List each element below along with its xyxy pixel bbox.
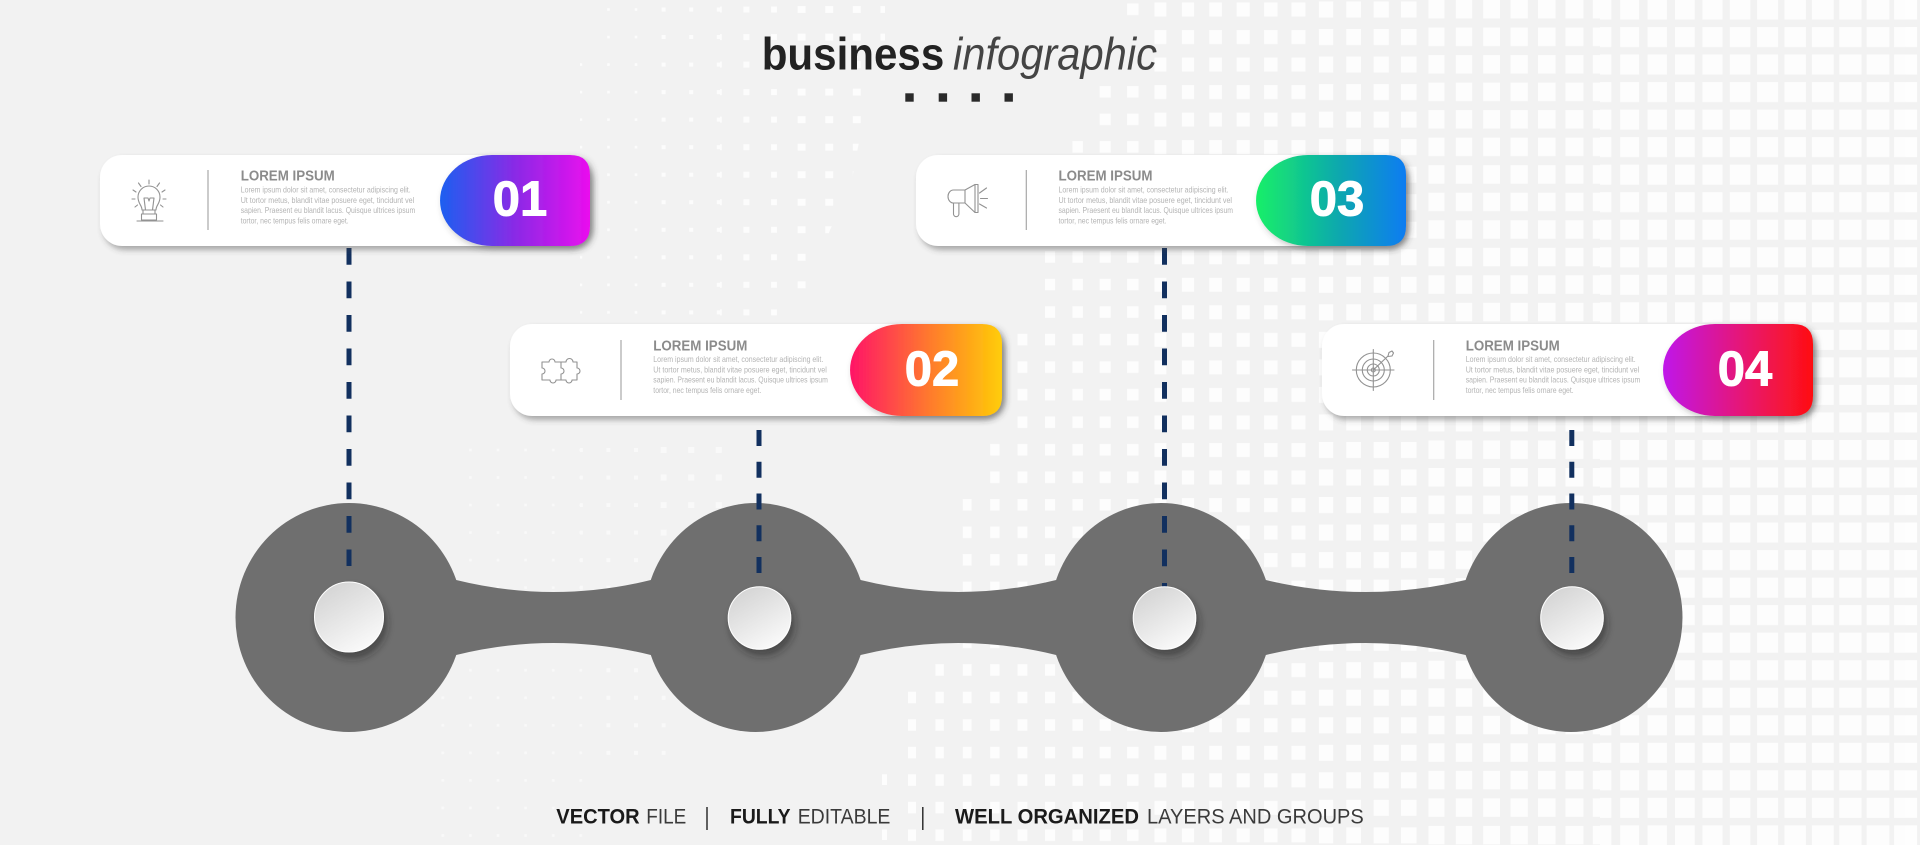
card 03 text: Lorem ipsum dolor sit amet, consectetur adipiscing elit. xyxy=(1058,184,1228,194)
card 01 text: Ut tortor metus, blandit vitae posuere eget, tincidunt vel xyxy=(241,195,414,205)
card 01 text: Lorem ipsum dolor sit amet, consectetur adipiscing elit. xyxy=(241,184,411,194)
node 1 xyxy=(314,582,384,652)
card 04 text: Ut tortor metus, blandit vitae posuere eget, tincidunt vel xyxy=(1466,364,1639,374)
card 02 text: Lorem ipsum dolor sit amet, consectetur adipiscing elit. xyxy=(653,354,823,364)
panel: card 01 xyxy=(100,155,590,246)
card 02 text: Ut tortor metus, blandit vitae posuere eget, tincidunt vel xyxy=(653,364,827,374)
card 03 text: LOREM IPSUM xyxy=(1058,169,1152,185)
badge 01: 01 xyxy=(493,172,547,226)
card 01 text: tortor, nec tempus felis ornare eget. xyxy=(241,216,349,226)
card 03 text: tortor, nec tempus felis ornare eget. xyxy=(1058,216,1166,226)
card 02 text: sapien. Praesent eu blandit lacus. Quisque ultrices ipsum xyxy=(653,375,828,385)
badge 01 xyxy=(440,155,590,246)
card 04 text: sapien. Praesent eu blandit lacus. Quisque ultrices ipsum xyxy=(1466,375,1640,385)
card 02 text xyxy=(653,339,828,395)
node 3 xyxy=(1133,587,1196,649)
card 04 text xyxy=(1466,339,1640,395)
connector 4 dashes xyxy=(1569,430,1574,573)
connector 2 dashes xyxy=(756,430,762,573)
title: infographic xyxy=(953,28,1157,79)
card 04 text: LOREM IPSUM xyxy=(1466,339,1560,355)
card 02 text: LOREM IPSUM xyxy=(653,339,747,355)
badge 02 xyxy=(850,324,1002,416)
footer tagline xyxy=(556,805,1364,830)
panel: card 03 xyxy=(916,155,1406,246)
icon: target xyxy=(1352,350,1394,390)
icon: megaphone xyxy=(948,184,988,217)
card 04 text: Lorem ipsum dolor sit amet, consectetur adipiscing elit. xyxy=(1466,354,1636,364)
badge 03 xyxy=(1256,155,1406,246)
footer tagline: FILE xyxy=(646,805,686,828)
badge 04 xyxy=(1663,324,1813,416)
connector 1 dashes xyxy=(346,248,352,566)
panel: card 02 xyxy=(510,324,1002,416)
card 02 text: tortor, nec tempus felis ornare eget. xyxy=(653,385,761,395)
card 01 text: sapien. Praesent eu blandit lacus. Quisque ultrices ipsum xyxy=(241,205,415,215)
footer tagline: EDITABLE xyxy=(798,805,890,828)
badge 03: 03 xyxy=(1310,172,1364,226)
panel: card 04 xyxy=(1322,324,1813,416)
title: business xyxy=(762,28,944,79)
node 4 xyxy=(1541,587,1603,649)
footer tagline: VECTOR xyxy=(556,805,640,828)
icon: light bulb xyxy=(132,180,166,221)
connector 3 dashes xyxy=(1162,248,1167,587)
badge 04: 04 xyxy=(1718,342,1772,396)
card 03 text: sapien. Praesent eu blandit lacus. Quisque ultrices ipsum xyxy=(1058,205,1233,215)
footer tagline: WELL ORGANIZED xyxy=(955,805,1139,828)
footer tagline: LAYERS AND GROUPS xyxy=(1147,805,1364,828)
icon: puzzle xyxy=(542,358,580,383)
card 04 text: tortor, nec tempus felis ornare eget. xyxy=(1466,385,1574,395)
card 03 text: Ut tortor metus, blandit vitae posuere eget, tincidunt vel xyxy=(1058,195,1232,205)
node 2 xyxy=(728,587,791,649)
card 01 text xyxy=(241,169,415,226)
footer tagline: FULLY xyxy=(730,805,791,828)
badge 02: 02 xyxy=(905,342,959,396)
card 03 text xyxy=(1058,169,1233,226)
title dots xyxy=(905,93,1013,102)
timeline chain xyxy=(236,503,1682,732)
card 01 text: LOREM IPSUM xyxy=(241,169,335,185)
title xyxy=(762,28,1157,79)
